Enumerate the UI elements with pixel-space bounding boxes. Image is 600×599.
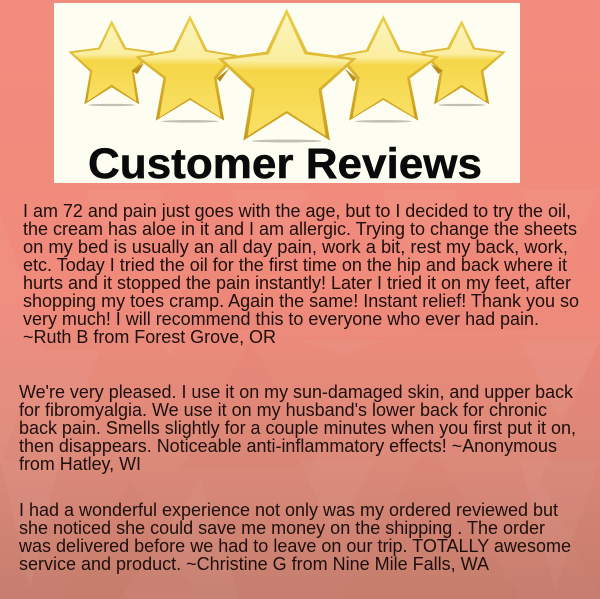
review: Ruth B: the cream has aloe in it and I am allergic. Trying to change the sheets [23, 218, 577, 239]
heading: Customer Reviews: Customer Reviews [88, 140, 482, 188]
icon: second star [135, 15, 237, 121]
icon: far right star [420, 20, 506, 104]
review: Anonymous: from Hatley, WI [19, 453, 141, 474]
review: Ruth B [23, 200, 579, 347]
icon: five gold stars [68, 8, 506, 142]
review: Ruth B: very much! I will recommend this to everyone who ever had pain. [23, 308, 539, 329]
review: Christine G: I had a wonderful experience not only was my ordered reviewed but [19, 499, 558, 520]
review: Anonymous: then disappears. Noticeable anti-inflammatory effects! ~Anonymous [19, 435, 557, 456]
icon: center star [218, 8, 357, 141]
review: Christine G: she noticed she could save me money on the shipping . The order [19, 517, 545, 538]
review: Anonymous [19, 381, 576, 474]
review: Anonymous: We're very pleased. I use it on my sun-damaged skin, and upper back [19, 381, 574, 402]
review: Christine G [18, 499, 571, 574]
review: Anonymous: back pain. Smells slightly for a couple minutes when you first put it on, [19, 417, 576, 438]
review: Anonymous: for fibromyalgia. We use it on my husband's lower back for chronic [19, 399, 547, 420]
review: Ruth B: etc. Today I tried the oil for the first time on the hip and back where it [23, 254, 567, 275]
review: Christine G: service and product. ~Christine G from Nine Mile Falls, WA [19, 553, 490, 574]
review: Ruth B: I am 72 and pain just goes with the age, but to I decided to try the oil, [23, 200, 571, 221]
review: Ruth B: ~Ruth B from Forest Grove, OR [23, 326, 276, 347]
icon: far left star [68, 20, 155, 104]
review: Ruth B: shopping my toes cramp. Again the same! Instant relief! Thank you so [23, 290, 579, 311]
review: Ruth B: on my bed is usually an all day pain, work a bit, rest my back, work, [23, 236, 568, 257]
review: Ruth B: hurts and it stopped the pain instantly! Later I tried it on my feet, after [23, 272, 571, 293]
review: Christine G: was delivered before we had to leave on our trip. TOTALLY awesome [18, 535, 571, 556]
star shadows [88, 104, 485, 142]
header panel: customer reviews banner [54, 3, 520, 188]
icon: fourth star [337, 15, 439, 121]
